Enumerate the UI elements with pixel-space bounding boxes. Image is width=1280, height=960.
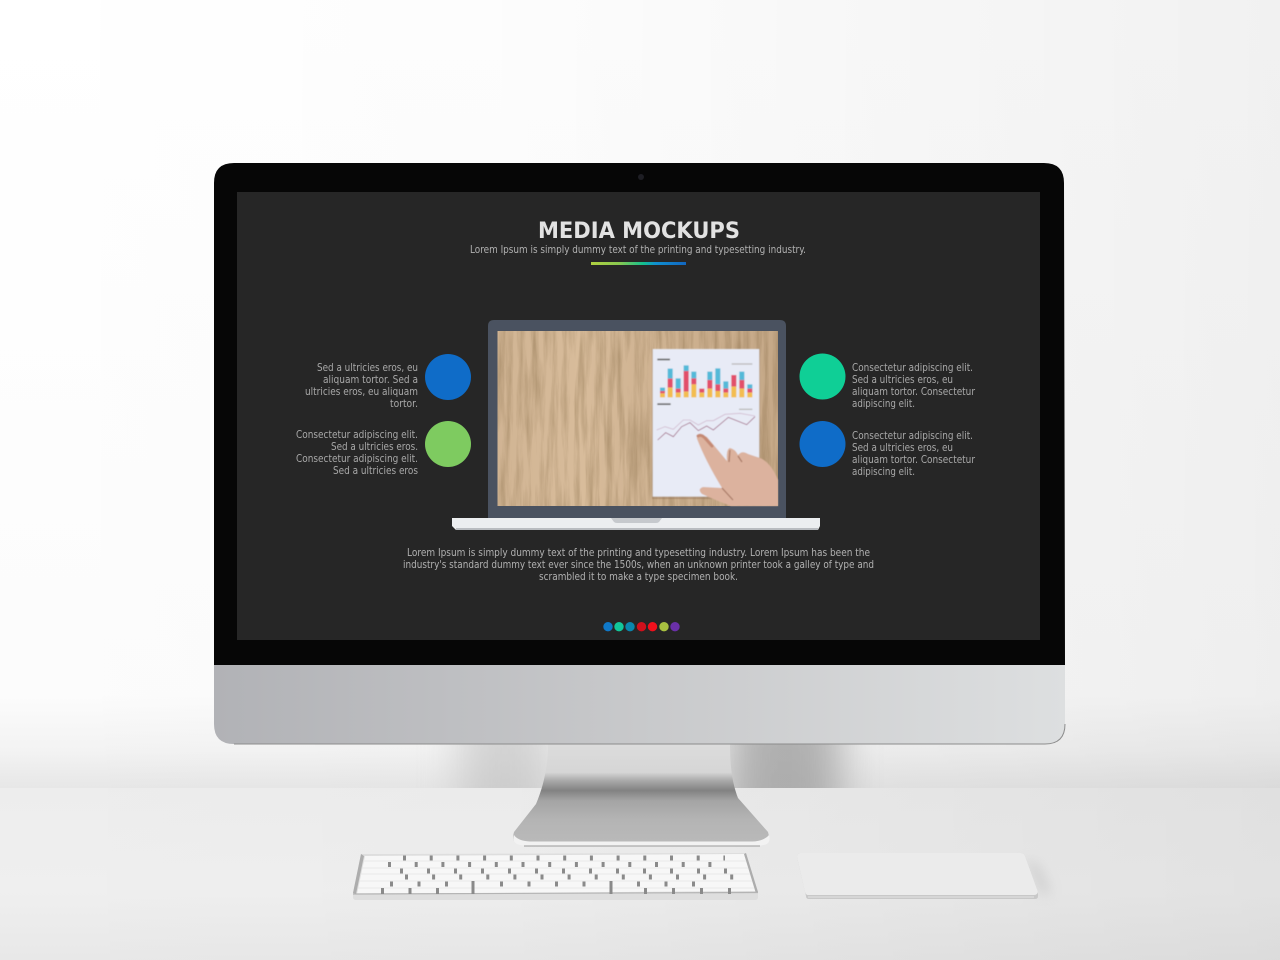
- photo: paper with charts: [653, 349, 759, 497]
- pagination dots: [603, 622, 680, 631]
- trackpad shadow: [1024, 858, 1052, 894]
- monitor: [214, 163, 1065, 744]
- text block: left bottom: Sed a ultricies eros.: [331, 441, 418, 453]
- text block: right bottom: adipiscing elit.: [852, 466, 915, 478]
- text block: right top: Sed a ultricies eros, eu: [852, 374, 953, 386]
- text block: right bottom: [852, 430, 976, 478]
- monitor bezel: [214, 163, 1065, 665]
- text block: left bottom: [296, 429, 418, 477]
- photo: hand: [697, 435, 778, 506]
- text block: right top: [852, 362, 976, 410]
- text block: right top: Consectetur adipiscing elit.: [852, 362, 973, 374]
- laptop lid: [488, 320, 786, 519]
- laptop mockup: [452, 320, 820, 530]
- body paragraph: scrambled it to make a type specimen book.: [539, 571, 738, 583]
- text block: left bottom: Consectetur adipiscing elit.: [296, 429, 418, 441]
- text block: left top: aliquam tortor. Sed a: [323, 374, 418, 386]
- icon circle: right top teal: [800, 354, 846, 400]
- text block: left bottom: Sed a ultricies eros: [333, 465, 418, 477]
- title: MEDIA MOCKUPS: [538, 219, 740, 244]
- text block: left top: tortor.: [390, 398, 418, 410]
- title underline: [591, 262, 686, 265]
- monitor stand: [513, 744, 770, 846]
- text block: left top: ultricies eros, eu aliquam: [305, 386, 418, 398]
- body paragraph: [403, 547, 874, 583]
- text block: right bottom: Sed a ultricies eros, eu: [852, 442, 953, 454]
- text block: right top: aliquam tortor. Consectetur: [852, 386, 976, 398]
- icon circle: left bottom green: [425, 421, 471, 467]
- text block: right bottom: Consectetur adipiscing elit.: [852, 430, 973, 442]
- laptop photo: [498, 331, 778, 506]
- laptop base: [452, 518, 820, 530]
- text block: left top: Sed a ultricies eros, eu: [317, 362, 418, 374]
- text block: right top: adipiscing elit.: [852, 398, 915, 410]
- photo: line chart: [657, 413, 755, 440]
- trackpad: [797, 853, 1052, 899]
- body paragraph: Lorem Ipsum is simply dummy text of the printing and typesetting industry. Lorem Ipsum has been the: [407, 547, 870, 559]
- text block: left top: [305, 362, 418, 410]
- subtitle: Lorem Ipsum is simply dummy text of the printing and typesetting industry.: [470, 244, 806, 256]
- slide screen: [237, 192, 1040, 640]
- webcam: [638, 174, 644, 180]
- photo: paper shadow: [652, 349, 760, 499]
- keyboard: [353, 853, 758, 900]
- text block: right bottom: aliquam tortor. Consectetur: [852, 454, 976, 466]
- icon circle: left top blue: [425, 354, 471, 400]
- icon circle: right bottom blue: [800, 421, 846, 467]
- monitor chin: [214, 660, 1065, 744]
- text block: left bottom: Consectetur adipiscing elit.: [296, 453, 418, 465]
- body paragraph: industry's standard dummy text ever since the 1500s, when an unknown printer took a galley of type and: [403, 559, 874, 571]
- photo: bar chart: [660, 365, 752, 397]
